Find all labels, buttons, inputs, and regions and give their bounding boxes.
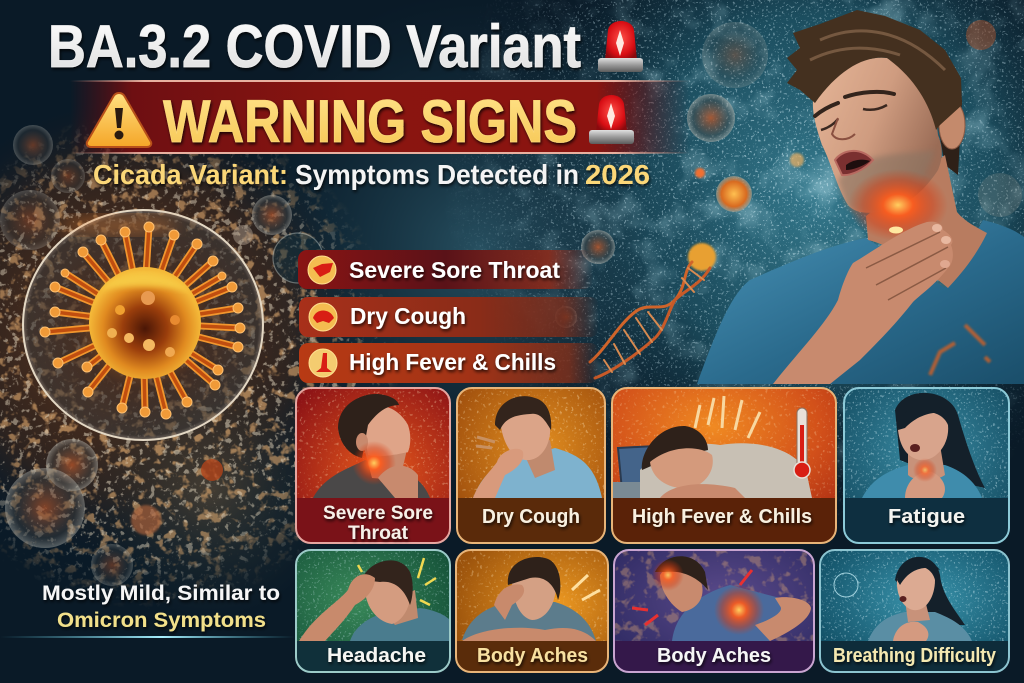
- hero brows and closed eyes: [815, 92, 894, 116]
- DNA helix: [590, 262, 710, 378]
- card label: Throat: [348, 523, 409, 544]
- callout: mostly mild: Omicron Symptoms: [57, 608, 266, 632]
- card label: Body Aches: [477, 645, 588, 667]
- hero nose and mouth: [832, 118, 855, 139]
- card: body aches orange: [456, 550, 608, 672]
- pill label: Dry Cough: [350, 303, 466, 329]
- hero face: [813, 58, 942, 213]
- pill label: Severe Sore Throat: [349, 257, 560, 283]
- hero throat glow: [848, 169, 948, 241]
- hero hand and forearm: [773, 222, 953, 384]
- card label: Headache: [327, 645, 426, 667]
- card: fatigue: [844, 388, 1009, 543]
- main title: BA.3.2 COVID Variant: [48, 13, 581, 80]
- icon: throat badge: [308, 256, 336, 284]
- subtitle: Cicada Variant:: [93, 159, 288, 190]
- card: severe sore throat: [296, 388, 450, 544]
- card: body aches purple: [614, 550, 814, 672]
- card: breathing difficulty: [820, 550, 1009, 672]
- hero stubble: [838, 150, 935, 213]
- warning banner: [70, 80, 690, 155]
- glow line under callout: [0, 636, 295, 638]
- icon: warning triangle: [87, 93, 151, 147]
- callout: mostly mild: [42, 581, 280, 632]
- icon: cough badge: [309, 303, 337, 331]
- subtitle: 2026: [585, 159, 650, 190]
- card label: High Fever & Chills: [632, 506, 812, 528]
- icon: fever badge: [309, 349, 337, 377]
- symptom pill: high fever: [299, 343, 599, 383]
- symptom pill: severe sore throat: [298, 250, 593, 289]
- hero hair: [787, 10, 962, 130]
- hero neck: [866, 155, 987, 288]
- hero shirt: [697, 220, 1024, 384]
- hero hair behind ear: [935, 100, 962, 175]
- card: headache: [296, 550, 450, 672]
- pill label: High Fever & Chills: [349, 349, 556, 375]
- glass sphere: [23, 210, 263, 440]
- heading: warning signs: WARNING SIGNS: [163, 88, 577, 155]
- card: dry cough: [457, 388, 605, 543]
- symptom pill: dry cough: [299, 297, 599, 337]
- icon: siren one: [598, 21, 643, 72]
- card label: Severe Sore: [323, 503, 433, 524]
- card label: Body Aches: [657, 645, 771, 667]
- card label: Fatigue: [888, 506, 965, 528]
- card label: [323, 503, 433, 544]
- subtitle: Symptoms Detected in: [295, 159, 579, 190]
- virus spike tips: [40, 222, 245, 419]
- card: high fever and chills: [612, 388, 836, 543]
- background virus particles: right side: [687, 20, 1022, 271]
- virus body: [89, 267, 201, 379]
- callout: mostly mild: Mostly Mild, Similar to: [42, 581, 280, 605]
- card label: Dry Cough: [482, 506, 580, 528]
- icon: siren two: [589, 95, 634, 144]
- virus spikes: [45, 227, 240, 414]
- background virus particles: left side: [0, 125, 615, 586]
- shirt virus specks: [930, 325, 990, 375]
- virus illustration in glass sphere: [23, 210, 263, 440]
- hero ear: [939, 101, 965, 149]
- subtitle: [93, 159, 650, 190]
- hero man holding sore throat: [697, 10, 1024, 384]
- card label: Breathing Difficulty: [833, 645, 997, 667]
